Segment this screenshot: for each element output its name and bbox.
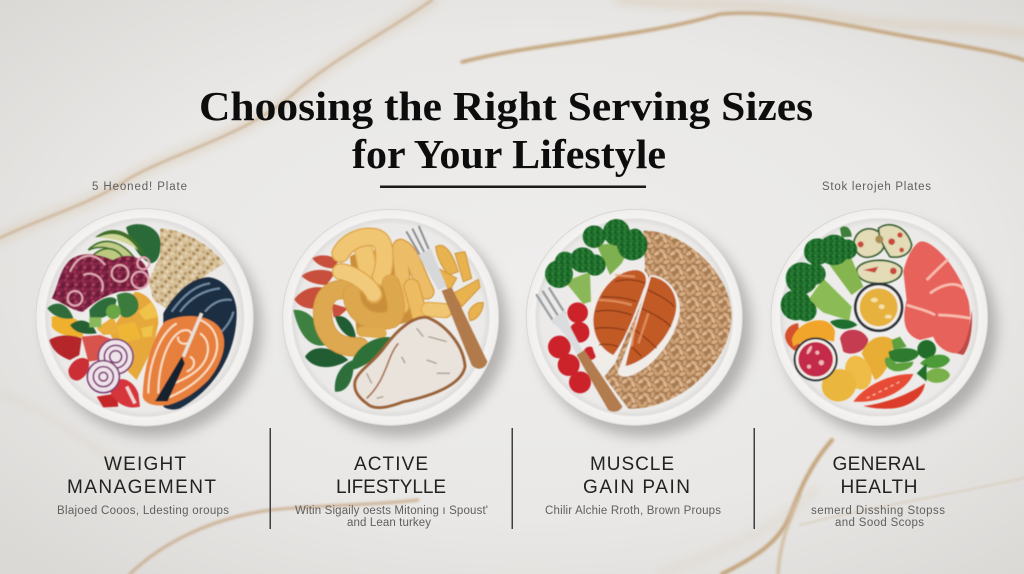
zucchini slices <box>840 225 912 283</box>
column: active lifestyle <box>295 454 488 529</box>
title: for Your Lifestyle <box>352 131 666 177</box>
column: weight management: WEIGHT <box>104 454 186 475</box>
column: general health: and Sood Scops <box>835 517 924 529</box>
mango pieces <box>52 292 158 380</box>
grilled chicken breast <box>589 268 680 377</box>
column: muscle gain: Chilir Alchie Rroth, Brown Proups <box>545 505 721 517</box>
radish <box>840 330 868 354</box>
penne <box>436 245 483 321</box>
pasta ribbons <box>323 237 445 347</box>
broccoli <box>545 219 648 304</box>
column: active lifestyle: Witin Sigaily oests Mitoning ı Spoust' <box>295 505 488 517</box>
pomegranate and onion <box>52 254 149 312</box>
fork <box>537 288 622 412</box>
divider 3 <box>754 428 755 529</box>
sliced turkey <box>355 317 465 408</box>
label: right plate caption: Stok lerojeh Plates <box>822 181 931 193</box>
title underline <box>380 186 646 188</box>
column: active lifestyle: LIFESTYLLE <box>336 477 446 498</box>
yellow sauce cup <box>854 283 903 332</box>
red peppers <box>294 255 348 318</box>
column: muscle gain: MUSCLE <box>590 454 674 475</box>
column: general health: GENERAL <box>832 454 926 475</box>
column: weight management: Blajoed Cooos, Ldesting oroups <box>57 505 229 517</box>
brown rice <box>604 231 732 409</box>
green leaves <box>47 293 139 334</box>
title: Choosing the Right Serving Sizes <box>199 83 813 129</box>
plate: muscle gain <box>526 209 752 437</box>
plate: active lifestyle <box>283 209 508 437</box>
column: general health <box>811 454 945 529</box>
red onion rings <box>87 339 133 393</box>
spinach leaves <box>126 224 161 263</box>
column: muscle gain: GAIN PAIN <box>583 477 690 498</box>
column: general health: semerd Disshing Stopss <box>811 505 945 517</box>
broccoli <box>781 235 863 329</box>
column: general health: HEALTH <box>840 477 918 498</box>
column: active lifestyle: and Lean turkey <box>347 517 431 529</box>
column: weight management <box>57 454 229 517</box>
fork <box>407 227 487 369</box>
label: left plate caption: 5 Heoned! Plate <box>92 181 187 193</box>
title <box>199 83 813 177</box>
plate: weight management <box>36 209 262 437</box>
basil leaves <box>293 310 356 392</box>
quinoa <box>148 228 224 311</box>
column: weight management: MANAGEMENT <box>67 477 216 498</box>
tomatoes <box>548 302 597 393</box>
salmon steak <box>143 277 237 410</box>
orange slices <box>785 320 835 353</box>
column: active lifestyle: ACTIVE <box>354 454 428 475</box>
green peppers <box>885 337 950 383</box>
yellow potatoes <box>817 337 893 406</box>
tuna slices <box>903 241 972 355</box>
tomato wedges <box>853 374 925 409</box>
avocado slices <box>88 230 145 263</box>
beetroot sauce cup <box>794 337 838 381</box>
plate: general health <box>771 209 997 437</box>
basil leaf over pasta <box>352 337 391 370</box>
divider 1 <box>270 428 271 529</box>
column: muscle gain <box>545 454 721 517</box>
divider 2 <box>512 428 513 529</box>
red peppers and radish <box>49 335 140 407</box>
